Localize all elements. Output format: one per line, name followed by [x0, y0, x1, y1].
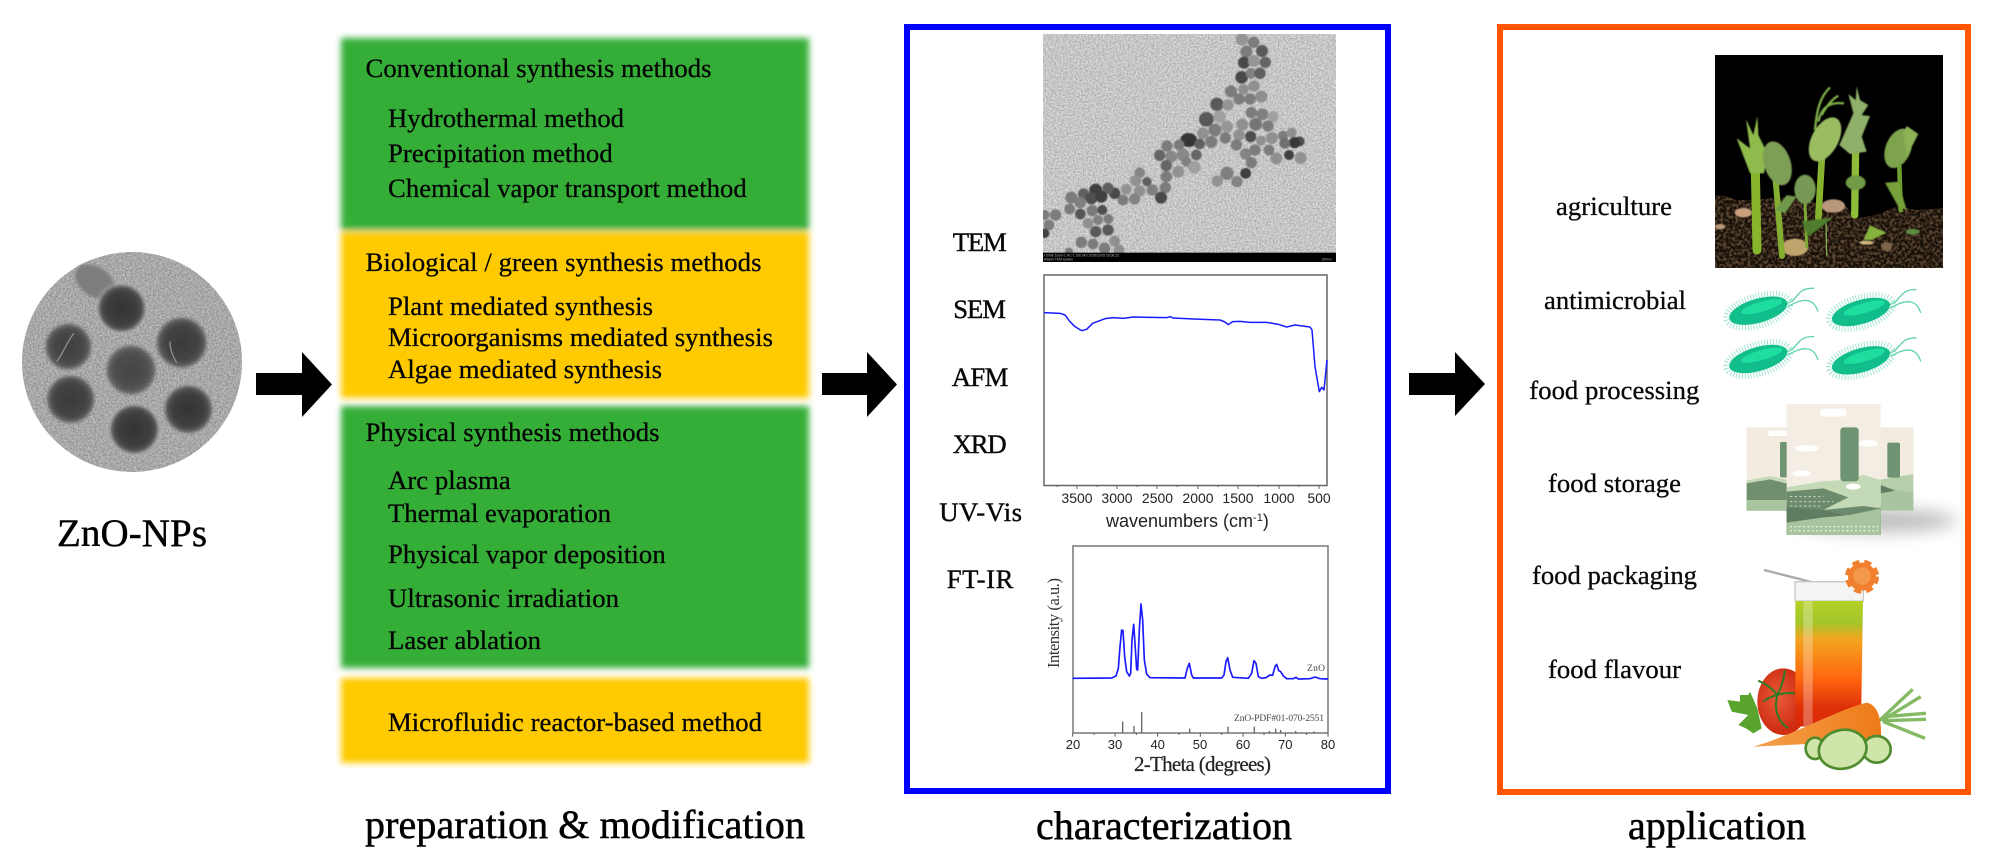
- panel: characterization frame: [907, 27, 1388, 791]
- biological methods text: Plant mediated synthesis: [388, 291, 653, 321]
- biological methods text: [366, 247, 773, 384]
- characterization technique labels: UV-Vis: [939, 497, 1022, 527]
- TEM micrograph: 100nm: [1321, 258, 1332, 262]
- XRD reference sticks: [1123, 712, 1314, 733]
- physical methods text: Ultrasonic irradiation: [388, 583, 619, 613]
- characterization technique labels: AFM: [952, 362, 1008, 392]
- XRD tick labels: 30: [1108, 737, 1122, 752]
- arrow: particles to preparation: [256, 352, 332, 417]
- soil: [1715, 195, 1943, 268]
- FT-IR spectrum chart: [1044, 275, 1331, 531]
- FT-IR tick labels: 3000: [1101, 490, 1133, 506]
- label: ZnO-NPs: ZnO-NPs: [57, 512, 207, 555]
- image: food packaging bags: [1747, 404, 1957, 535]
- glass and juice: [1795, 582, 1863, 727]
- XRD ticks: [1073, 733, 1328, 737]
- FT-IR tick labels: 1000: [1263, 490, 1295, 506]
- application labels: food storage: [1548, 468, 1681, 498]
- characterization technique labels: FT-IR: [947, 564, 1014, 594]
- microfluidic method text: Microfluidic reactor-based method: [388, 707, 763, 737]
- block backgrounds: [341, 38, 809, 763]
- conventional methods text: Conventional synthesis methods: [366, 53, 712, 83]
- cucumber slices: [1806, 725, 1891, 773]
- panel: application frame: [1500, 27, 1968, 792]
- application labels: [1529, 191, 1699, 684]
- physical methods text: Thermal evaporation: [388, 498, 611, 528]
- XRD pattern chart: ZnO-PDF#01-070-2551: [1234, 714, 1324, 724]
- biological methods text: Algae mediated synthesis: [388, 354, 662, 384]
- FT-IR tick labels: 1500: [1222, 490, 1254, 506]
- side bags: [1747, 427, 1913, 511]
- XRD tick labels: 60: [1236, 737, 1250, 752]
- FT-IR axis title: wavenumbers (cm: [1106, 511, 1253, 531]
- biological methods text: Biological / green synthesis methods: [366, 247, 762, 277]
- carrot greens: [1879, 689, 1926, 738]
- XRD axis titles: 2-Theta (degrees): [1134, 752, 1271, 776]
- application labels: food packaging: [1532, 560, 1697, 590]
- FT-IR tick labels: 3500: [1061, 490, 1093, 506]
- microscope data bar: [1043, 253, 1336, 262]
- physical methods text: Arc plasma: [388, 465, 511, 495]
- FT-IR tick labels: 2500: [1142, 490, 1173, 506]
- heading: application: application: [1628, 803, 1806, 848]
- XRD pattern chart: Intensity (a.u.): [1044, 578, 1063, 668]
- carrot slice: [1848, 563, 1876, 591]
- conventional methods text: Hydrothermal method: [388, 103, 625, 133]
- FT-IR axis title: ): [1263, 511, 1269, 531]
- characterization technique labels: TEM: [953, 227, 1007, 257]
- XRD tick labels: 40: [1150, 737, 1165, 752]
- application labels: food flavour: [1548, 654, 1681, 684]
- FT-IR tick labels: 500: [1307, 490, 1331, 506]
- arrow: characterization to application: [1409, 352, 1485, 416]
- image: juice glass with vegetables: [1727, 563, 1926, 773]
- panel: preparation methods: [341, 38, 809, 763]
- physical methods text: [366, 417, 666, 655]
- straw: [1764, 570, 1819, 600]
- physical methods text: Physical vapor deposition: [388, 539, 666, 569]
- panel: ZnO nanoparticle TEM circle: [22, 252, 242, 472]
- FT-IR axis title: -1: [1253, 512, 1263, 524]
- XRD annotations: ZnO: [1307, 664, 1325, 674]
- icon: four green bacteria: [1724, 288, 1921, 382]
- seedling stems: [1755, 147, 1901, 256]
- application labels: food processing: [1529, 375, 1699, 405]
- XRD pattern chart: [1044, 546, 1335, 776]
- application labels: antimicrobial: [1544, 285, 1686, 315]
- nanoparticle clusters: [1040, 33, 1307, 256]
- TEM micrograph: [1040, 33, 1336, 262]
- heading: preparation & modification: preparation & modification: [365, 802, 805, 847]
- TEM micrograph: x 500k Zoom-1 HC-1 100.0kV 2018/11/05 16:06:23: [1044, 254, 1119, 258]
- FT-IR tick labels: [1061, 490, 1331, 506]
- biological methods text: Microorganisms mediated synthesis: [388, 322, 773, 352]
- characterization technique labels: XRD: [953, 429, 1007, 459]
- characterization technique labels: [939, 227, 1022, 594]
- bag shadow: [1797, 509, 1957, 533]
- heading: characterization: characterization: [1036, 803, 1292, 848]
- XRD tick labels: 70: [1278, 737, 1293, 752]
- arrow: preparation to characterization: [822, 352, 897, 417]
- XRD tick labels: 20: [1066, 737, 1080, 752]
- physical methods text: Physical synthesis methods: [366, 417, 660, 447]
- parsley: [1727, 692, 1762, 733]
- core-shell particles: [46, 257, 212, 455]
- tomato: [1757, 668, 1809, 735]
- TEM micrograph: Hitachi TEM system: [1044, 258, 1073, 262]
- XRD curve: [1073, 604, 1328, 679]
- XRD tick labels: 80: [1321, 737, 1335, 752]
- FT-IR tick labels: 2000: [1182, 490, 1214, 506]
- XRD tick labels: 50: [1193, 737, 1207, 752]
- conventional methods text: Precipitation method: [388, 138, 613, 168]
- FT-IR ticks: [1057, 485, 1319, 489]
- stones and seeds: [1715, 199, 1892, 256]
- physical methods text: Laser ablation: [388, 625, 541, 655]
- centre bag: [1787, 404, 1881, 535]
- FT-IR curve: [1044, 313, 1327, 392]
- carrot: [1753, 703, 1881, 747]
- leaves: [1737, 86, 1919, 240]
- particle cracks: [57, 333, 177, 363]
- conventional methods text: Chemical vapor transport method: [388, 173, 747, 203]
- application labels: agriculture: [1556, 191, 1672, 221]
- conventional methods text: [366, 53, 747, 203]
- XRD tick labels: [1066, 737, 1335, 752]
- characterization technique labels: SEM: [953, 294, 1006, 324]
- image: pea seedlings in soil: [1715, 55, 1943, 268]
